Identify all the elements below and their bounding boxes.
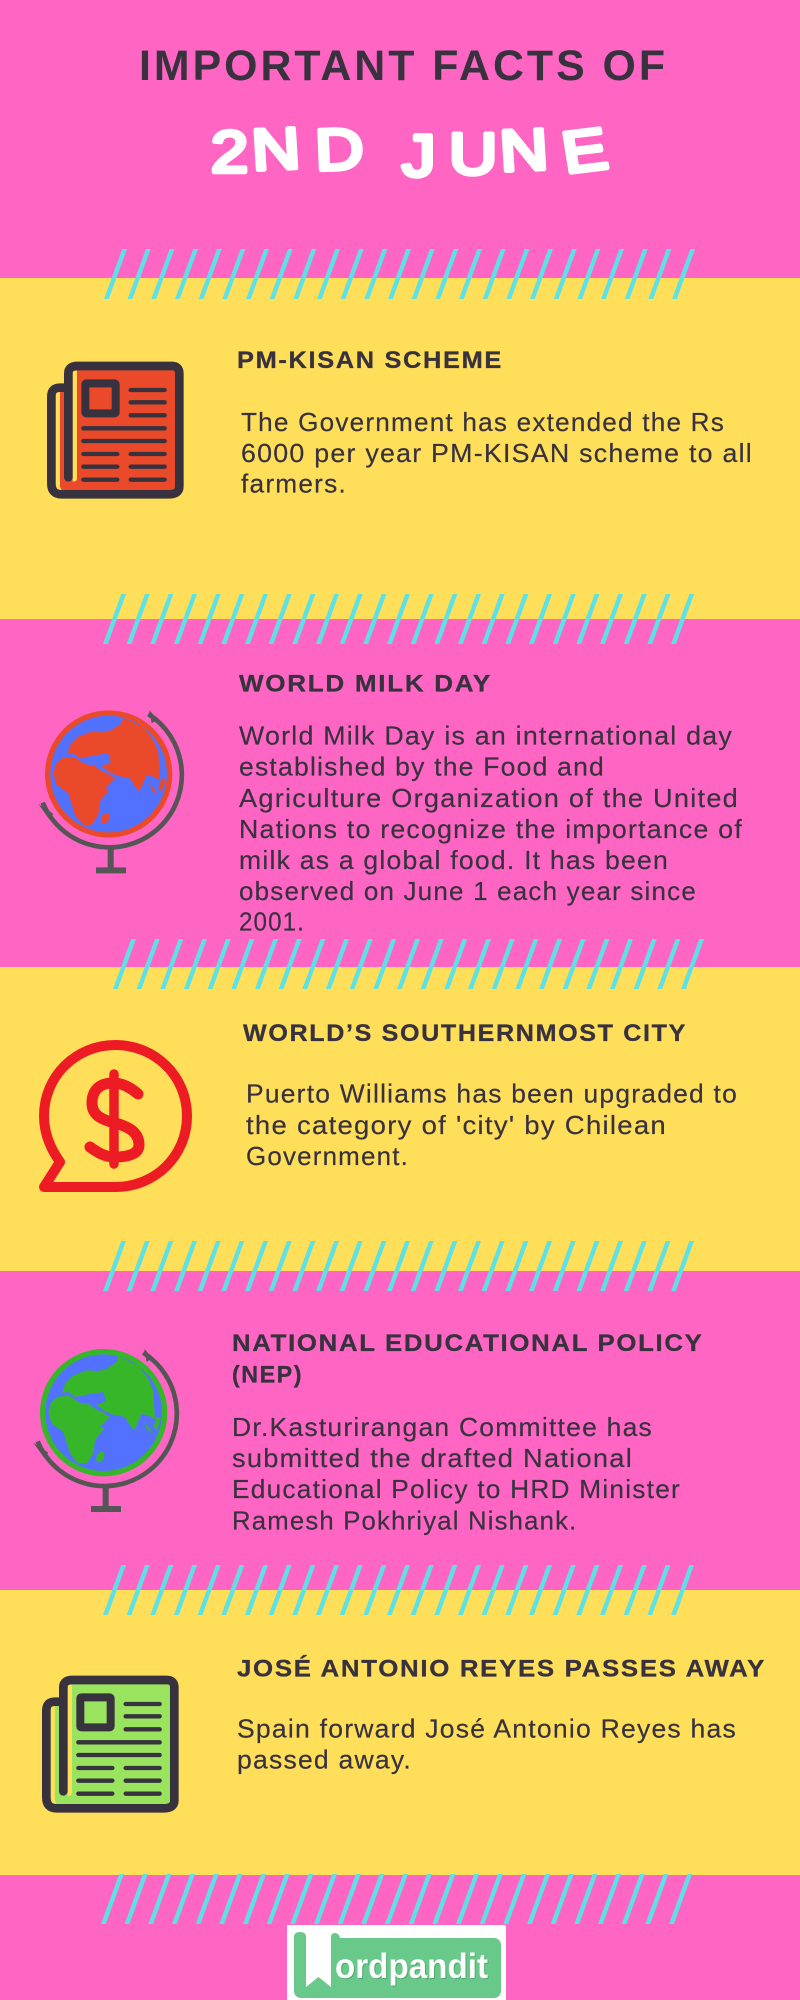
icon: red dollar speech bubble [44, 1045, 187, 1187]
text: PM-Kisan body: farmers. [241, 468, 347, 498]
panel: National Educational Policy [0, 1271, 800, 1590]
heading: World's southernmost city: WORLD’S SOUTHERNMOST CITY [243, 1020, 687, 1047]
text: education policy body [232, 1412, 681, 1536]
text: PM-Kisan body [241, 407, 753, 498]
text: education policy body: Dr.Kasturirangan Committee has [232, 1412, 653, 1442]
logo: Wordpandit [287, 1925, 506, 2000]
text: southernmost city body [246, 1079, 738, 1171]
icon: green newspaper [46, 1680, 174, 1808]
text: PM-Kisan body: 6000 per year PM-KISAN scheme to all [241, 438, 753, 468]
panel: PM-Kisan scheme [0, 278, 800, 619]
icon: red globe [38, 710, 182, 870]
text: World Milk Day body: milk as a global food. It has been [239, 845, 669, 875]
text: World Milk Day body: Agriculture Organization of the United [239, 783, 739, 813]
heading: National Educational Policy: NATIONAL EDUCATIONAL POLICY [232, 1330, 704, 1357]
text: southernmost city body: Government. [246, 1141, 409, 1171]
text: José Antonio Reyes body: Spain forward José Antonio Reyes has [237, 1714, 737, 1744]
title: date: 2ND JUNE [211, 116, 612, 189]
title: important facts of: IMPORTANT FACTS OF [139, 42, 668, 90]
panel: World Milk Day [0, 619, 800, 967]
heading: National Educational Policy: (NEP) [232, 1362, 303, 1389]
text: PM-Kisan body: The Government has extended the Rs [241, 407, 725, 437]
text: southernmost city body: the category of 'city' by Chilean [246, 1110, 667, 1140]
text: southernmost city body: Puerto Williams has been upgraded to [246, 1079, 738, 1109]
panel: footer [0, 1875, 800, 2000]
text: World Milk Day body: Nations to recognize the importance of [239, 814, 743, 844]
panel: José Antonio Reyes [0, 1590, 800, 1875]
icon: green globe [33, 1349, 177, 1509]
text: education policy body: submitted the drafted National [232, 1443, 633, 1473]
text: World Milk Day body: established by the Food and [239, 752, 605, 782]
panel: World's southernmost city [0, 967, 800, 1271]
heading: National Educational Policy [232, 1330, 704, 1389]
text: World Milk Day body: World Milk Day is an international day [239, 721, 733, 751]
text: World Milk Day body: 2001. [239, 907, 305, 937]
text: education policy body: Ramesh Pokhriyal Nishank. [232, 1506, 578, 1536]
heading: World Milk Day: WORLD MILK DAY [239, 670, 492, 698]
heading: PM-Kisan scheme: PM-KISAN SCHEME [237, 347, 503, 374]
logo: Wordpandit: ordpandit [336, 1948, 489, 1987]
logo: Wordpandit: ordpandit [335, 1947, 488, 1986]
text: José Antonio Reyes body: passed away. [237, 1745, 412, 1775]
icon: red newspaper [51, 366, 179, 494]
text: education policy body: Educational Policy to HRD Minister [232, 1474, 681, 1504]
text: José Antonio Reyes body [237, 1714, 737, 1775]
heading: José Antonio Reyes: JOSÉ ANTONIO REYES PASSES AWAY [237, 1655, 766, 1683]
text: World Milk Day body: observed on June 1 each year since [239, 876, 697, 906]
text: World Milk Day body [239, 721, 743, 937]
panel: header [0, 0, 800, 278]
